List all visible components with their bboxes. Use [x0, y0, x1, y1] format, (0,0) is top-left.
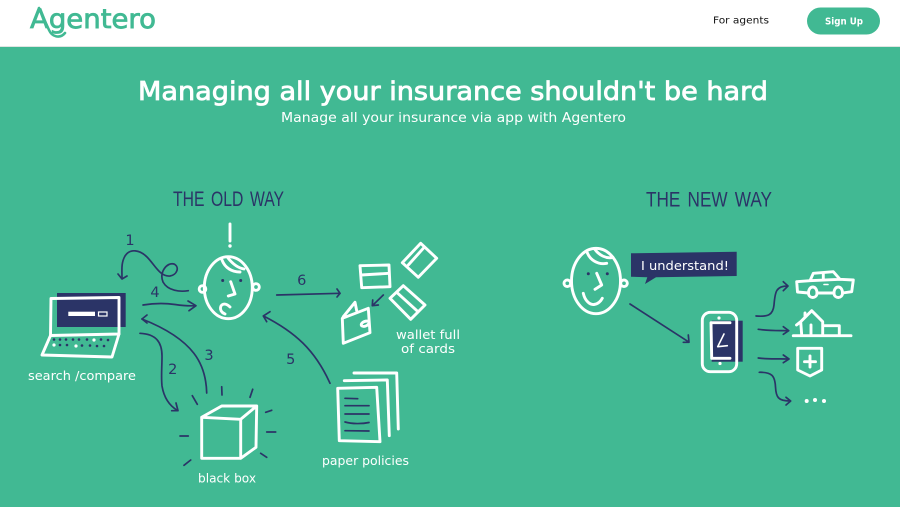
sign up button: Sign Up — [825, 16, 863, 28]
arrow to car — [756, 282, 788, 316]
title: Managing all your insurance shouldn't be hard — [138, 77, 768, 107]
subtitle: Manage all your insurance via app with Agentero — [281, 111, 626, 126]
label: search / compare: search /compare — [28, 368, 136, 383]
icon: exclamation mark — [228, 224, 232, 248]
more dots — [805, 398, 826, 403]
heading: the new way: THE NEW WAY — [646, 188, 772, 212]
arrow 1 — [118, 251, 188, 291]
icon: car — [797, 272, 853, 298]
heading: the old way: THE OLD WAY — [173, 188, 284, 211]
step number 4: 4 — [150, 285, 160, 301]
icon: cards and wallet — [342, 243, 437, 343]
step number 6: 6 — [297, 273, 306, 289]
nav link: For agents — [713, 16, 769, 26]
arrow 6 — [277, 289, 340, 297]
header bar — [0, 0, 900, 47]
arrow to shield — [758, 355, 789, 363]
icon: shield with plus — [798, 348, 822, 376]
step number 1: 1 — [125, 233, 135, 249]
arrow 3 — [142, 315, 207, 393]
icon: happy face — [564, 248, 627, 314]
label: black box: black box — [198, 470, 256, 486]
arrow: face to phone — [630, 304, 689, 342]
arrow 2 — [140, 333, 178, 411]
label: paper policies: paper policies — [322, 453, 409, 468]
card 2 — [402, 243, 437, 277]
icon: laptop — [42, 293, 126, 357]
arrow to house — [758, 327, 789, 334]
label: wallet full of cards — [396, 327, 460, 356]
card 1 — [360, 265, 390, 288]
arrow 4 — [143, 301, 196, 311]
label: wallet full of cards: of cards — [401, 341, 455, 356]
icon: phone with app — [702, 312, 743, 372]
label: wallet full of cards: wallet full — [396, 327, 460, 342]
wallet — [342, 302, 370, 343]
icon: black box — [180, 387, 276, 465]
speech bubble: I understand! — [641, 258, 729, 273]
card 3 — [390, 286, 425, 319]
step number 2: 2 — [168, 362, 177, 378]
step number 3: 3 — [204, 348, 214, 364]
sign up button — [807, 8, 880, 34]
speech bubble — [631, 252, 737, 284]
icon: paper policies — [338, 373, 398, 442]
step number 5: 5 — [286, 352, 295, 368]
icon: worried face — [199, 257, 259, 319]
arrow 5 — [263, 312, 330, 383]
icon: house — [793, 311, 851, 336]
small arrow to wallet — [372, 295, 383, 306]
arrow to more — [759, 372, 791, 405]
logo: Agentero — [30, 4, 156, 35]
